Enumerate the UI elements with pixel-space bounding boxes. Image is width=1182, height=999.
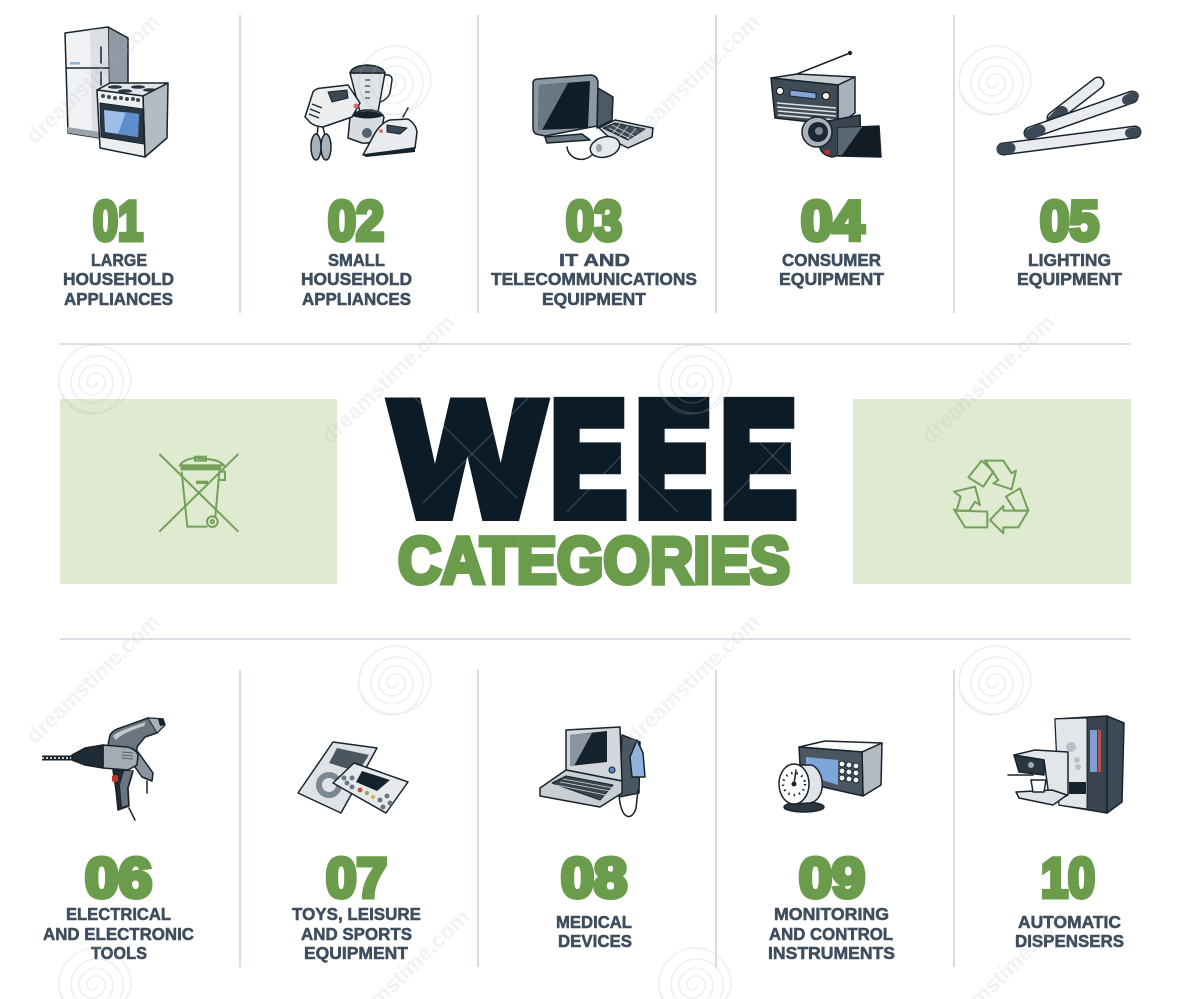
icon: drill and heat gun (42, 718, 165, 820)
panel: category 08 medical devices (540, 727, 645, 951)
watermark: spirals and stock photo marks: dreamstime.com (21, 609, 164, 749)
panel: category 10 automatic dispensers (1008, 716, 1124, 951)
label: monitoring and control instruments (768, 904, 895, 963)
label: toys, leisure and sports equipment (292, 904, 421, 963)
number 10: 10 (1041, 846, 1095, 909)
label: small household appliances: APPLIANCES (302, 289, 411, 309)
icon: radio and camcorder (771, 51, 881, 157)
icon: monitoring unit and gauge (779, 741, 882, 812)
title: WEEE: E (551, 369, 626, 548)
icon: medical monitor with probe (540, 727, 645, 817)
panel: category 05 lighting equipment (1002, 83, 1136, 289)
label: electrical and electronic tools: AND ELECTRONIC (43, 924, 194, 944)
label: automatic dispensers (1015, 912, 1124, 951)
label: consumer equipment (779, 250, 884, 289)
watermark: spirals and stock photo marks: dreamstime.com (621, 9, 764, 149)
number 03: 03 (566, 189, 622, 252)
label: large household appliances (63, 250, 174, 309)
icon: fluorescent tubes (1002, 83, 1136, 149)
watermark: spirals and stock photo marks: dreamstime.com (316, 309, 459, 449)
watermark: spirals and stock photo marks: dreamstime.com (21, 9, 164, 149)
label: electrical and electronic tools: TOOLS (91, 943, 147, 963)
title: WEEE: E (721, 369, 796, 548)
number 06: 06 (85, 846, 152, 909)
label: toys, leisure and sports equipment: EQUIPMENT (304, 943, 408, 963)
icon: mixer, blender and iron (305, 65, 417, 160)
icon: crossed-out wheelie bin (159, 454, 238, 532)
panel: category 06 electrical and electronic tools (42, 718, 194, 963)
panel: category 01 large household appliances (63, 27, 174, 309)
icon: handheld game devices (298, 742, 408, 813)
subtitle: CATEGORIES: CATEGORIES (398, 523, 790, 597)
number 01: 01 (93, 189, 143, 252)
label: toys, leisure and sports equipment: AND SPORTS (301, 924, 412, 944)
label: IT and telecommunications equipment (491, 250, 697, 309)
label: small household appliances: HOUSEHOLD (301, 269, 412, 289)
label: electrical and electronic tools (43, 904, 194, 963)
icon: vending machine and coffee machine (1008, 716, 1124, 813)
panel: category 04 consumer equipment (771, 51, 884, 289)
label: monitoring and control instruments: MONITORING (774, 904, 889, 924)
number 05: 05 (1040, 189, 1099, 252)
label: consumer equipment: EQUIPMENT (779, 269, 884, 289)
label: automatic dispensers: AUTOMATIC (1018, 912, 1121, 932)
label: small household appliances (301, 250, 412, 309)
icon: recycling arrows (954, 461, 1028, 533)
label: monitoring and control instruments: INSTRUMENTS (768, 943, 895, 963)
label: monitoring and control instruments: AND CONTROL (769, 924, 893, 944)
label: IT and telecommunications equipment: EQUIPMENT (542, 289, 646, 309)
label: large household appliances: LARGE (91, 250, 147, 270)
panel: left WEEE bin symbol (60, 399, 337, 584)
label: medical devices (556, 912, 632, 951)
label: lighting equipment: LIGHTING (1028, 250, 1111, 270)
icon: computer, keyboard and mouse (533, 75, 653, 161)
label: large household appliances: APPLIANCES (64, 289, 173, 309)
number 02: 02 (328, 189, 384, 252)
panel: category 09 monitoring and control instruments (768, 741, 895, 963)
label: IT and telecommunications equipment: IT AND (559, 250, 630, 270)
label: toys, leisure and sports equipment: TOYS, LEISURE (292, 904, 421, 924)
label: medical devices: DEVICES (558, 931, 632, 951)
label: consumer equipment: CONSUMER (782, 250, 881, 270)
watermark: spirals and stock photo marks: dreamstime.com (916, 309, 1059, 449)
label: small household appliances: SMALL (328, 250, 385, 270)
number 04: 04 (801, 189, 864, 252)
panel: category 07 toys, leisure and sports equipment (292, 742, 421, 963)
label: electrical and electronic tools: ELECTRICAL (66, 904, 171, 924)
panel: category 02 small household appliances (301, 65, 417, 309)
title: WEEE: E (636, 369, 711, 548)
label: IT and telecommunications equipment: TELECOMMUNICATIONS (491, 269, 697, 289)
label: large household appliances: HOUSEHOLD (63, 269, 174, 289)
label: automatic dispensers: DISPENSERS (1015, 931, 1124, 951)
label: medical devices: MEDICAL (556, 912, 632, 932)
label: lighting equipment: EQUIPMENT (1017, 269, 1122, 289)
panel: right recycling symbol (853, 399, 1131, 584)
number 09: 09 (799, 846, 865, 909)
icon: fridge and oven (65, 27, 168, 157)
title: WEEE (392, 369, 796, 550)
panel: category 03 IT and telecommunications equipment (491, 75, 697, 309)
number 08: 08 (561, 846, 627, 909)
label: lighting equipment (1017, 250, 1122, 289)
title: WEEE: W (392, 369, 543, 550)
watermark: spirals and stock photo marks: dreamstime.com (621, 609, 764, 749)
number 07: 07 (326, 846, 387, 909)
